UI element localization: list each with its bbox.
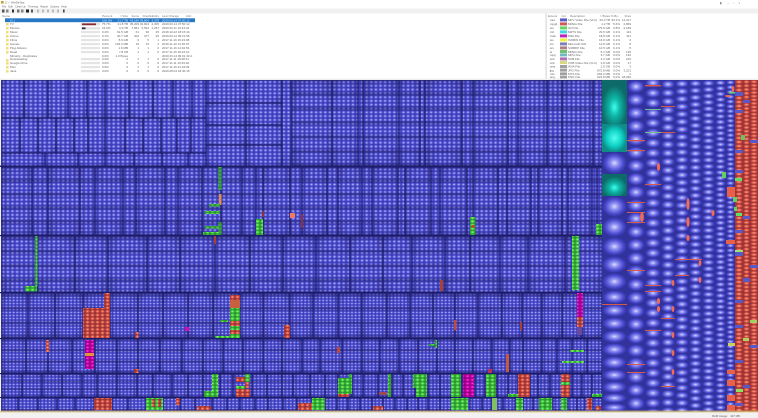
folder icons <box>6 23 9 73</box>
extension rows text: .iso <box>549 38 554 42</box>
treemap column: large files with teal cells <box>602 80 627 412</box>
window title: C:\ - WinDirStat <box>5 0 25 4</box>
last change column: 2017.11.11 19:33:02 <box>162 61 189 65</box>
items and files columns: Items <box>132 14 139 18</box>
directory rows text: Read <box>10 50 18 54</box>
extension rows text: .srs <box>549 46 554 50</box>
extension size columns: 2 <box>629 72 631 76</box>
extension size columns: 3 <box>629 38 631 42</box>
extension rows text: Microsoft ISO <box>568 42 587 46</box>
extension rows text: .mts <box>549 72 555 76</box>
extension size columns: 623.8 MB <box>597 75 610 79</box>
items and files columns: 377 <box>144 34 149 38</box>
extension rows text: MPG File <box>568 53 581 57</box>
extension size columns: 0.0% <box>613 75 620 79</box>
items and files columns: 0 <box>137 61 139 65</box>
extension size columns: 136 <box>626 53 631 57</box>
percent column: 0.0% <box>102 65 109 69</box>
title and menu bar <box>0 0 758 9</box>
extension rows text: .png <box>549 75 555 79</box>
items and files columns: Files <box>143 14 149 18</box>
items and files columns: 6 <box>137 38 139 42</box>
last change column: 2020.03.14 09:01:33 A <box>162 54 192 58</box>
directory list header: Name <box>2 14 10 18</box>
extension size columns: 311 <box>626 34 631 38</box>
toolbar <box>0 8 758 14</box>
items and files columns: 402 <box>134 34 139 38</box>
extension size columns: 20.3 TB <box>600 18 610 22</box>
items and files columns: 61 <box>136 30 139 34</box>
treemap row 7 <box>1 398 602 412</box>
panel: extension list: % By... <box>611 14 620 18</box>
extension size columns: 5.6% <box>613 22 620 26</box>
percent column: Percent <box>102 14 113 18</box>
last change column: 2020.08.04 18:40:15 <box>162 69 190 73</box>
extension rows text: .avi <box>549 26 554 30</box>
last change column: 2018.10.22 18:15:44 <box>162 30 190 34</box>
extension rows text: MTS File <box>568 72 580 76</box>
subdirs column: 0 <box>157 57 159 61</box>
directory rows text: TV <box>10 22 14 26</box>
size column: 0 <box>126 57 128 61</box>
subdirs column: Subdirs <box>149 14 160 18</box>
percent column: 0.0% <box>102 54 109 58</box>
last change column: 2017.11.16 18:22:10 <box>162 50 190 54</box>
panel: extension list: > Bytes <box>600 14 610 18</box>
size column: 21.7 TB <box>118 18 128 22</box>
subdirs column: 1 <box>157 38 159 42</box>
percent column: 0.0% <box>102 42 109 46</box>
extension rows text <box>549 18 597 79</box>
extension size columns: 0.1% <box>613 30 620 34</box>
extension rows text: MKV Video File (VLC) <box>568 18 597 22</box>
extension rows text: .mpg <box>549 53 556 57</box>
extension size columns: 0.0% <box>613 72 620 76</box>
extension header: Extens. Col. Description <box>548 14 585 18</box>
directory rows text: Anime <box>10 34 19 38</box>
percent column: 0.0% <box>102 50 109 54</box>
extension size columns <box>597 18 631 79</box>
panel: extension list: Files <box>625 14 631 18</box>
extension size columns: 16.9 GB <box>599 38 610 42</box>
items and files columns: 0 <box>147 61 149 65</box>
extension size columns: 5.1 GB <box>601 50 610 54</box>
extension rows text: ISOBIN File <box>568 38 584 42</box>
extension rows text: WVA File <box>568 65 580 69</box>
size column: 6.9 TB <box>119 26 128 30</box>
subdirs column <box>149 14 160 73</box>
treemap row 2 <box>0 167 602 236</box>
extension rows text: M2TS File <box>568 30 582 34</box>
extension size columns: 0.0% <box>613 65 620 69</box>
extension size columns: 0.1% <box>613 46 620 50</box>
extension rows text: MPEG File <box>568 50 583 54</box>
extension rows text: VOB Video File (VLC) <box>568 61 597 65</box>
size column: 8.6 GB <box>119 38 128 42</box>
last change column: 2017.11.16 21:18:09 <box>162 65 190 69</box>
directory rows text: Java <box>10 69 17 73</box>
last change column: 2020.03.12 09:21:56 <box>162 34 190 38</box>
extension size columns: 3.7 GB <box>601 53 610 57</box>
last change column: 2020.03.11 19:44:22 <box>162 26 190 30</box>
directory rows text: Movies <box>10 26 20 30</box>
window controls: ▮ – ▫ × <box>720 1 741 5</box>
extension size columns: 18.8 GB <box>599 34 610 38</box>
treemap row 4 <box>0 293 602 339</box>
extension size columns: 29.5 GB <box>599 30 610 34</box>
extension size columns: 136 <box>626 50 631 54</box>
size column: 1.6 MB <box>118 46 128 50</box>
items and files columns: 1 <box>137 46 139 50</box>
extension rows text: .ts <box>549 50 553 54</box>
scan progress line at the treemap bottom <box>0 411 758 412</box>
items and files columns: 1 <box>137 57 139 61</box>
items and files columns: 43,184 <box>130 18 139 22</box>
size column <box>115 14 128 73</box>
extension size columns: 17 <box>628 61 631 65</box>
extension size columns: 2.8 GB <box>601 61 610 65</box>
extension rows text: SUBRIP File <box>568 46 585 50</box>
last change column: 2017.11.16 14:02:53 <box>162 46 190 50</box>
colour swatches <box>560 18 567 78</box>
percent column: 0.0% <box>102 46 109 50</box>
subtree percent bars <box>81 23 100 72</box>
extension size columns: 8 <box>629 42 631 46</box>
selected row highlight <box>5 18 195 22</box>
extension size columns: 872.8 MB <box>597 68 610 72</box>
last change column: 2019.11.10 14:30:07 <box>162 42 190 46</box>
directory rows text <box>10 18 38 73</box>
last change column: 2020.03.14 07:50:12 <box>162 22 190 26</box>
items and files columns: 0 <box>147 69 149 73</box>
last change column <box>162 14 192 73</box>
items and files columns: 35,209 <box>130 22 139 26</box>
last change column: 2017.11.11 18:48:11 <box>162 57 189 61</box>
extension size columns: 0.1% <box>613 42 620 46</box>
items and files columns: 32,904 <box>140 22 149 26</box>
treemap columns: small red files <box>735 80 758 412</box>
subdirs column: 1,257 <box>151 26 159 30</box>
red and green accents in the right columns <box>602 85 758 411</box>
extension rows text: .mpg4 <box>549 22 558 26</box>
extension size columns: 0.1% <box>613 34 620 38</box>
last change column: 2017.11.16 16:23:08 <box>162 38 190 42</box>
extension size columns: 1.2 TB <box>601 22 610 26</box>
subdirs column: 0 <box>157 46 159 50</box>
extension rows text: JPG File <box>568 68 580 72</box>
extension size columns: 0.0% <box>613 57 620 61</box>
green and red file patches, row 2 <box>203 167 602 236</box>
percent column: 0.0% <box>102 38 109 42</box>
subdirs column: 0 <box>157 61 159 65</box>
extension rows text: .m4a <box>549 34 556 38</box>
directory rows text: Films <box>10 38 18 42</box>
extension rows text: .vob <box>549 61 555 65</box>
panel: extension list <box>546 14 758 79</box>
extension size columns: 0.0% <box>613 50 620 54</box>
percent column: 0.1% <box>102 34 109 38</box>
status bar <box>0 413 758 418</box>
extension size columns: 3 <box>629 65 631 69</box>
size column: 62.5 GB <box>117 30 128 34</box>
percent column: 0.0% <box>102 69 109 73</box>
items and files columns: 0 <box>137 69 139 73</box>
extension rows text: .ico <box>549 42 554 46</box>
red and green file patches, row 7 <box>94 398 601 410</box>
size column: 0 <box>126 65 128 69</box>
size column: 0 <box>126 69 128 73</box>
extension rows text: .mkv <box>549 18 556 22</box>
items and files columns: 39,804 <box>140 18 149 22</box>
items and files columns: 15 <box>146 42 149 46</box>
items and files columns: 19 <box>136 42 139 46</box>
extension size columns: 0.0% <box>613 53 620 57</box>
items and files columns: 1 <box>147 50 149 54</box>
extension size columns: 10.5 GB <box>599 46 610 50</box>
size column: 0 <box>126 61 128 65</box>
percent column: 0.0% <box>102 57 109 61</box>
extension size columns: 0.8% <box>613 26 620 30</box>
items and files columns: 5 <box>147 38 149 42</box>
items and files columns: 1 <box>147 57 149 61</box>
subdirs column: 25 <box>156 34 159 38</box>
directory rows text: (C:) <box>10 18 15 22</box>
extension rows text: M4A File <box>568 34 580 38</box>
status bar: RAM Usage: 427 MB <box>712 414 740 418</box>
extension rows text: MPEG File <box>568 22 583 26</box>
size column: 163.2 MB <box>115 42 128 46</box>
last change column: Attri <box>186 14 192 18</box>
last change column: 2020.03.14 07:50:12 <box>162 18 190 22</box>
directory rows text: Google Drive <box>10 61 28 65</box>
directory rows text: Games <box>10 42 20 46</box>
green and red file patches, row 3 <box>25 236 579 292</box>
percent column: 24.0% <box>102 26 111 30</box>
size column: 7.8 KB <box>119 50 128 54</box>
extension rows text: .sub <box>549 57 555 61</box>
items and files columns: 6,594 <box>141 26 149 30</box>
extension size columns: 14.8 GB <box>599 42 610 46</box>
items and files columns: 1 <box>147 65 149 69</box>
red, green and magenta file patches, row 4 <box>83 293 583 338</box>
extension rows text: .m2 <box>549 30 554 34</box>
percent column: 0.0% <box>102 61 109 65</box>
directory rows text: Plug Ableton <box>10 46 27 50</box>
treemap row 3 <box>0 236 602 293</box>
extension size columns: 2,869 <box>623 22 631 26</box>
subdirs column: 0 <box>157 69 159 73</box>
subdirs column: 2,305 <box>151 22 159 26</box>
extension size columns: 0.0% <box>613 68 620 72</box>
treemap row 6 <box>0 374 602 398</box>
directory rows text: Downloading <box>10 57 28 61</box>
extension size columns: 18,290 <box>622 75 631 79</box>
panel: directory list <box>0 14 546 78</box>
extension rows text: SUB File <box>568 57 580 61</box>
extension rows text: .jpg <box>549 68 554 72</box>
items and files columns: 1 <box>137 65 139 69</box>
extension size columns: 3,221 <box>623 68 631 72</box>
extension size columns: 3.2 GB <box>601 57 610 61</box>
percent column: 0.2% <box>102 30 109 34</box>
size column: 1.0 Bytes <box>115 54 128 58</box>
extension size columns: 0.0% <box>613 61 620 65</box>
percent column: 100.0% <box>102 18 113 22</box>
items and files columns: 1 <box>137 50 139 54</box>
treemap row 1 <box>0 80 602 167</box>
extension size columns: 215 <box>626 57 631 61</box>
extension size columns: 179.9 GB <box>597 26 610 30</box>
percent column <box>102 14 113 73</box>
extension size columns: 2,189 <box>623 26 631 30</box>
treemap <box>0 80 758 412</box>
extension rows text: AVI File <box>568 26 579 30</box>
subdirs column: 3,378 <box>151 18 159 22</box>
subdirs column: 0 <box>157 50 159 54</box>
subdirs column: 0 <box>157 65 159 69</box>
directory rows text: Plex <box>10 65 16 69</box>
treemap row 5 <box>0 339 602 374</box>
menu items: File Edit Clean Up Treemap Report Options Help <box>2 5 67 9</box>
size column: 21.8 TB <box>118 22 128 26</box>
subdirs column: 25 <box>156 30 159 34</box>
extension size columns: 5 <box>629 46 631 50</box>
extension size columns: 93.1% <box>611 18 620 22</box>
treemap columns: mid-size files <box>627 80 735 412</box>
extension size columns: 113 <box>626 30 631 34</box>
extension rows text: .wva <box>549 65 556 69</box>
percent column: 75.7% <box>102 22 111 26</box>
items and files columns: 7,851 <box>131 26 139 30</box>
extension size columns: 694.2 MB <box>597 72 610 76</box>
magenta, red and green file patches, row 5 <box>46 340 584 373</box>
extension size columns: 2.5 GB <box>601 65 610 69</box>
last change column: Last Change <box>162 14 179 18</box>
size column: 30.7 GB <box>117 34 128 38</box>
directory rows text: Music <box>10 30 18 34</box>
items and files columns: 36 <box>146 30 149 34</box>
directory rows text: Minority - Duplicates <box>10 54 38 58</box>
items and files columns: 1 <box>147 46 149 50</box>
size column: > Size <box>120 14 128 18</box>
extension size columns: 14,417 <box>622 18 631 22</box>
subdirs column: 4 <box>157 42 159 46</box>
extension rows text: PNG File <box>568 75 580 79</box>
green, red and magenta file patches, row 6 <box>204 374 602 397</box>
items and files columns <box>130 14 149 73</box>
extension size columns: 0.1% <box>613 38 620 42</box>
